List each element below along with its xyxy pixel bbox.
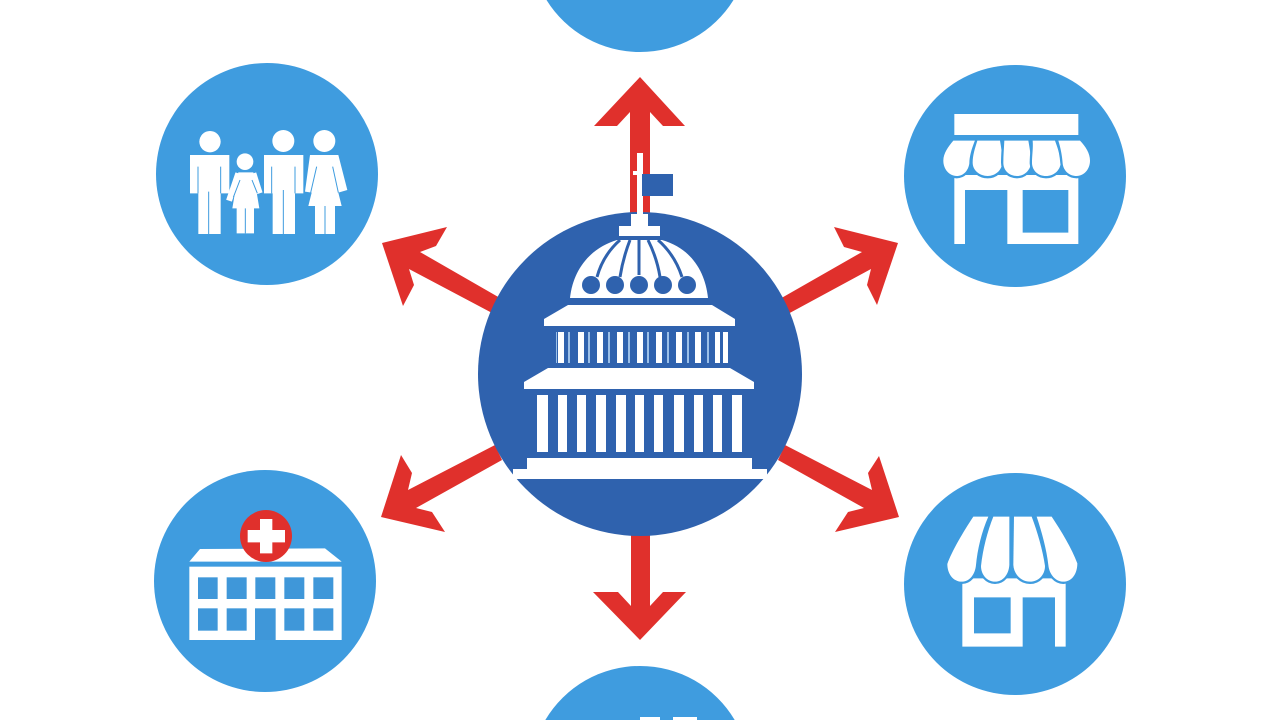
building base xyxy=(513,458,767,479)
arrow: down xyxy=(593,530,686,640)
cupola base xyxy=(619,214,660,236)
upper cornice xyxy=(544,305,735,326)
icon: family xyxy=(190,130,347,234)
flag xyxy=(642,174,673,196)
icon: hospital xyxy=(189,510,342,640)
panel: storefront circle upper right xyxy=(904,65,1126,287)
panel: storefront circle lower right xyxy=(904,473,1126,695)
panel: top circle xyxy=(546,0,734,52)
flagpole xyxy=(633,153,643,217)
limb gaps xyxy=(198,167,338,234)
arrow: upper left xyxy=(382,227,500,314)
lower colonnade xyxy=(537,395,742,452)
panel: bottom circle xyxy=(545,666,735,720)
panel: central government circle xyxy=(478,153,802,536)
lower cornice xyxy=(524,368,754,389)
dome xyxy=(570,240,708,298)
arrow: lower right xyxy=(778,445,899,532)
arrow: upper right xyxy=(778,227,898,315)
icon: storefront with awning xyxy=(947,517,1077,647)
panel: family circle xyxy=(156,63,378,285)
icon: capitol building xyxy=(513,153,767,479)
arrow: lower left xyxy=(381,445,502,532)
icon: cropped top of bottom icon xyxy=(640,717,697,720)
upper colonnade xyxy=(556,332,728,363)
arrow: up xyxy=(594,77,685,220)
panel: hospital circle xyxy=(154,470,376,692)
icon: storefront with sign xyxy=(943,114,1090,244)
